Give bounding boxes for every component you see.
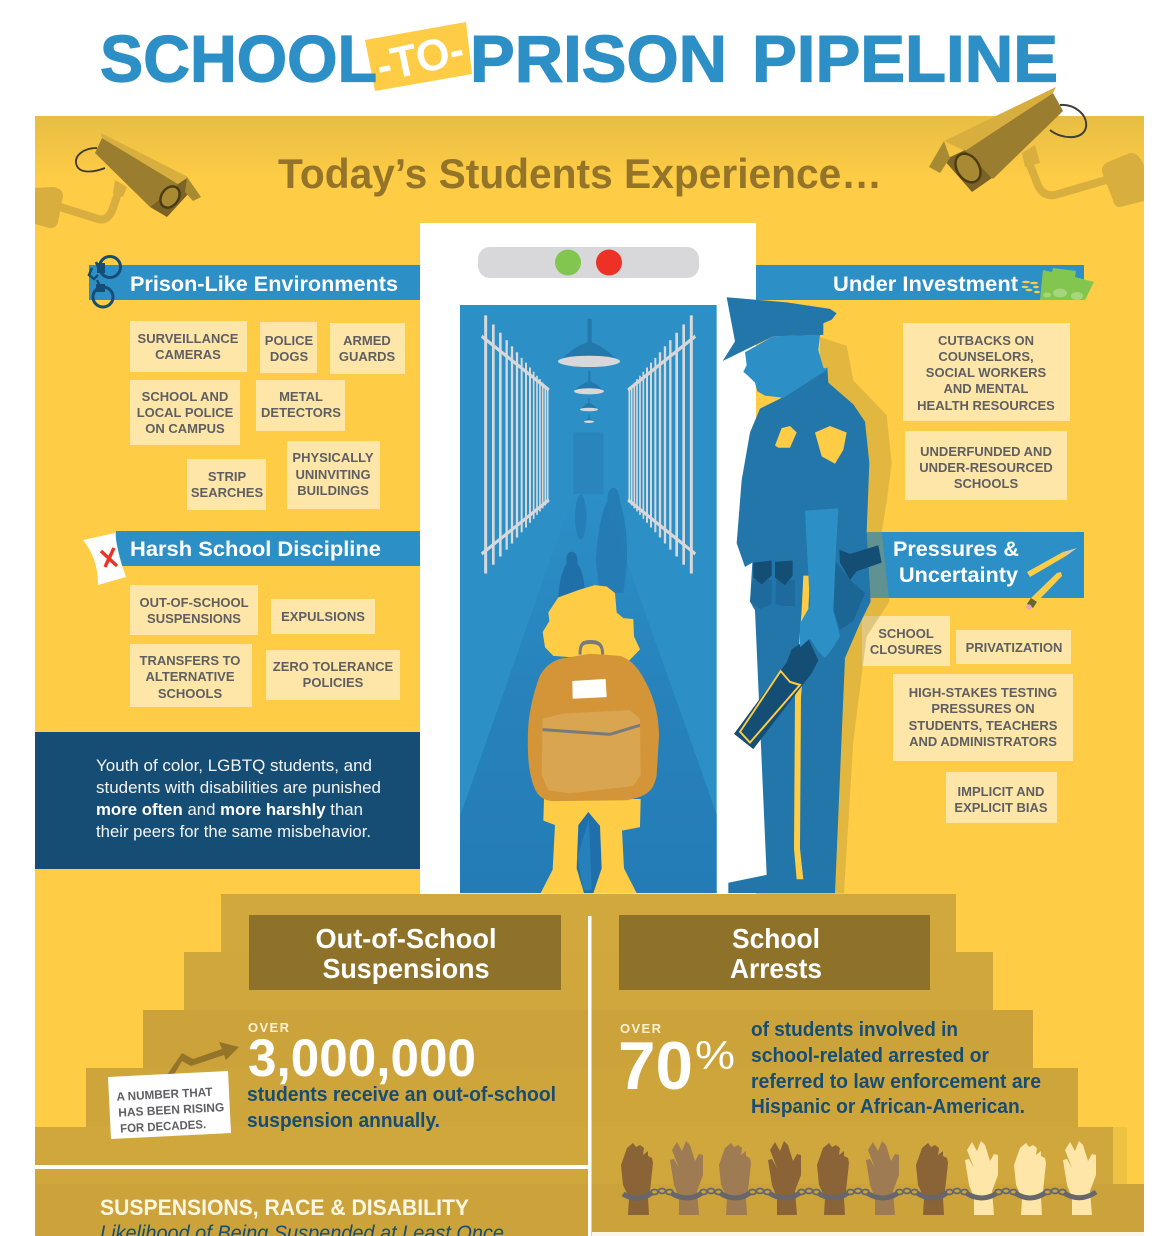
tag: school and local police: SCHOOL AND [142,389,228,404]
tag: armed guards [330,323,405,374]
badges [775,426,847,464]
banner: under investment [756,265,1084,300]
callout: rising number card: FOR DECADES. [120,1117,206,1136]
panel: out-of-school suspensions [108,915,561,1139]
tag: school closures: CLOSURES [870,642,942,657]
banner: prison-like environments: Prison-Like Environments [130,273,398,296]
tag: school closures: SCHOOL [878,626,934,641]
tag: cutbacks on counselors: COUNSELORS, [938,349,1034,364]
title: SCHOOL [100,22,377,96]
stat: 70 percent [618,1028,735,1104]
title: PIPELINE [752,22,1058,96]
banner: pressures and uncertainty [850,532,1084,598]
officer body [728,367,871,893]
panel: pressures and uncertainty [850,532,1084,823]
tag: out-of-school suspensions: OUT-OF-SCHOOL [139,595,249,610]
tag: police dogs: POLICE [265,333,314,348]
dividers [35,916,592,1236]
student with backpack [528,585,659,893]
stat description: school-related arrested or [751,1045,989,1067]
tag: high-stakes testing: HIGH-STAKES TESTING [909,685,1057,700]
school steps [35,894,1144,1236]
tag: school closures [862,616,950,666]
legs and shorts [541,799,641,893]
tag: zero tolerance policies: POLICIES [303,675,364,690]
title [100,22,1058,96]
stat: 3,000,000: 3,000,000 [248,1029,476,1088]
tag: zero tolerance policies: ZERO TOLERANCE [273,659,394,674]
tag: underfunded schools: SCHOOLS [954,476,1018,491]
banner: under investment: Under Investment [833,273,1018,296]
tag: strip searches: STRIP [208,469,246,484]
title: PRISON [470,22,727,96]
metal detector frame [420,223,756,894]
tag: physically uninviting buildings: BUILDINGS [297,483,369,498]
callout: rising number card: A NUMBER THAT [116,1085,213,1104]
icon: ceiling lamps [558,319,620,423]
heading: out-of-school suspensions: Suspensions [322,953,490,984]
tag: armed guards: GUARDS [339,349,395,364]
callout: youth of color: more often and more harshly than [96,801,363,819]
tag: out-of-school suspensions [130,585,258,635]
tag: police dogs [260,322,317,373]
tag: cutbacks on counselors [903,323,1070,421]
icon: left security camera [35,133,201,228]
tag: implicit and explicit bias: EXPLICIT BIAS [954,800,1048,815]
arrow: rising [167,1042,239,1078]
tag: metal detectors: METAL [279,389,323,404]
banner: harsh school discipline: Harsh School Discipline [130,538,381,561]
tag: privatization: PRIVATIZATION [966,640,1062,655]
officer arm [800,508,840,658]
icon: failed paper [83,533,126,585]
tag: school and local police [130,380,240,445]
icon: right security camera [929,87,1144,207]
icon: left jail bars [482,315,549,573]
callout: rising number card: HAS BEEN RISING [118,1100,225,1120]
title tag: to: -TO- [372,25,468,91]
panel: harsh school discipline [83,531,420,707]
tag: armed guards: ARMED [343,333,391,348]
heading: suspensions, race and disability: SUSPENSIONS, RACE & DISABILITY [100,1195,469,1220]
icon: right jail bars [628,315,695,573]
tag: school and local police: ON CAMPUS [145,421,225,436]
stat description: referred to law enforcement are [751,1071,1041,1093]
hair [543,585,640,662]
metal detector wand [734,639,818,749]
icon: broken pencil [1026,548,1077,610]
tag: underfunded schools: UNDER-RESOURCED [919,460,1053,475]
stat description [247,1084,556,1132]
heading: out-of-school suspensions: Out-of-School [316,923,496,954]
tag: expulsions: EXPULSIONS [281,609,365,624]
tag: transfers to alternative schools: SCHOOLS [158,686,222,701]
tag: implicit and explicit bias [946,772,1057,823]
tag: privatization [956,630,1071,664]
callout: youth of color: their peers for the same misbehavior. [96,823,371,841]
officer cap [723,297,837,361]
tag: implicit and explicit bias: IMPLICIT AND [958,784,1044,799]
tag: metal detectors [256,380,345,431]
banner: harsh school discipline [116,531,420,566]
white door edge [753,558,767,879]
heading: out-of-school suspensions [249,915,561,990]
tag: underfunded schools [905,431,1067,500]
panel: prison-like environments [89,256,420,510]
heading: school arrests [619,915,930,990]
corridor scene [460,305,717,893]
stat: 70 percent: % [695,1034,735,1078]
stat description: suspension annually. [247,1110,440,1132]
stat description: students receive an out-of-school [247,1084,556,1106]
tag: surveillance cameras: CAMERAS [155,347,221,362]
tag: high-stakes testing: AND ADMINISTRATORS [909,734,1057,749]
officer shadow [820,337,892,893]
holster and gun [833,545,882,630]
tag: cutbacks on counselors: SOCIAL WORKERS [926,365,1047,380]
tag: police dogs: DOGS [270,349,308,364]
icon: handcuffs [89,256,120,307]
tag: surveillance cameras: SURVEILLANCE [138,331,239,346]
panel: under investment [756,265,1094,500]
tag: underfunded schools: UNDERFUNDED AND [920,444,1052,459]
tag: surveillance cameras [130,321,247,372]
callout: rising number card [108,1071,231,1139]
icon: chained hands [621,1141,1096,1215]
belt pouches [750,560,795,609]
tag: physically uninviting buildings: UNINVITING [295,467,371,482]
tag: transfers to alternative schools [130,644,252,707]
tag: physically uninviting buildings: PHYSICALLY [292,450,374,465]
tag: cutbacks on counselors: CUTBACKS ON [938,333,1034,348]
icon: money [1022,268,1094,300]
stat label: over: OVER [620,1021,662,1036]
backpack [528,642,659,801]
tag: cutbacks on counselors: AND MENTAL [944,381,1029,396]
heading: school arrests: Arrests [730,953,822,984]
tag: cutbacks on counselors: HEALTH RESOURCES [917,398,1055,413]
tag: physically uninviting buildings [287,441,380,509]
panel: school arrests [618,915,1096,1215]
banner: pressures and uncertainty: Pressures & [893,538,1019,561]
callout: youth of color: Youth of color, LGBTQ students, and [96,757,372,775]
uniform trouser stripe [794,576,810,879]
officer head [743,335,827,398]
heading: today's students experience: Today’s Students Experience… [278,150,882,197]
tag: high-stakes testing [893,674,1073,761]
distant student silhouettes [558,488,627,597]
tag: high-stakes testing: PRESSURES ON [931,701,1035,716]
police officer [723,297,892,893]
callout: youth of color: students with disabilities are punished [96,779,381,797]
callout: youth of color [35,732,420,869]
stat description [751,1019,1041,1118]
tag: out-of-school suspensions: SUSPENSIONS [147,611,241,626]
tag: transfers to alternative schools: TRANSFERS TO [140,653,240,668]
heading: school arrests: School [732,923,820,954]
tag: high-stakes testing: STUDENTS, TEACHERS [909,718,1058,733]
tag: transfers to alternative schools: ALTERNATIVE [145,669,235,684]
tag: metal detectors: DETECTORS [261,405,341,420]
tag: school and local police: LOCAL POLICE [137,405,234,420]
banner: prison-like environments [89,265,420,300]
stat description: of students involved in [751,1019,958,1041]
detector light bar [478,247,699,278]
tag: strip searches: SEARCHES [191,485,263,500]
stat label: over: OVER [248,1020,290,1035]
tag: expulsions [271,599,375,634]
banner: pressures and uncertainty: Uncertainty [899,564,1018,587]
panel: suspensions, race and disability [100,1195,504,1236]
stat description: Hispanic or African-American. [751,1096,1025,1118]
stat: 70 percent: 70 [618,1028,693,1104]
tag: strip searches [187,459,266,510]
tag: zero tolerance policies [266,650,400,700]
